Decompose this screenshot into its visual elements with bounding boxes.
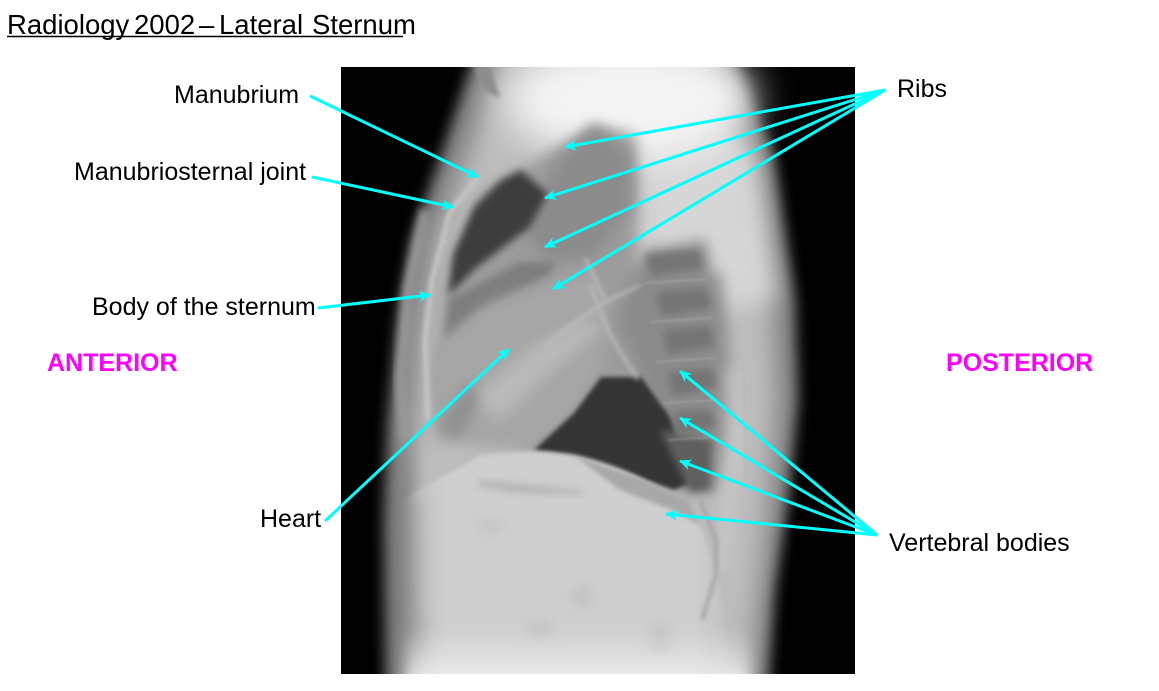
arrow: Manubrium bbox=[310, 96, 478, 177]
vertebral bodies bbox=[645, 250, 716, 436]
middle lung band bbox=[445, 262, 555, 340]
label: Body of the sternum: Body of the sternum bbox=[92, 293, 316, 321]
neck notch bbox=[474, 67, 500, 98]
lower abdomen shading bbox=[534, 590, 668, 645]
rib and vascular markings bbox=[564, 258, 641, 382]
title: 2002 bbox=[134, 9, 195, 40]
posterior soft tissue bbox=[724, 370, 742, 492]
left lower chest bbox=[417, 438, 514, 490]
label: Ribs: Ribs bbox=[897, 75, 947, 103]
bottom brightness bbox=[396, 636, 758, 674]
gastric bubble bbox=[478, 480, 585, 495]
title bbox=[7, 9, 416, 40]
title: Sternum bbox=[312, 9, 416, 40]
chest x-ray image bbox=[341, 40, 855, 691]
label: Manubriosternal joint: Manubriosternal joint bbox=[74, 158, 306, 186]
arrow: Body of the sternum bbox=[318, 295, 430, 308]
sternum edge bbox=[425, 178, 478, 420]
inner body density bbox=[412, 40, 778, 691]
arrow: Heart bbox=[325, 349, 509, 521]
title: Lateral bbox=[219, 9, 303, 40]
upper lung dark bbox=[448, 170, 548, 296]
arrow: Manubriosternal joint bbox=[312, 177, 453, 207]
subdiaphragm shadow bbox=[575, 456, 700, 525]
arrows: Vertebral bodies bbox=[666, 371, 877, 535]
shoulder brightness bbox=[640, 100, 775, 310]
vertebral end plates bbox=[645, 279, 716, 440]
anterior chest wall bbox=[400, 210, 425, 440]
arrows: Ribs bbox=[545, 90, 885, 289]
title: Radiology bbox=[7, 9, 130, 40]
label: Manubrium: Manubrium bbox=[174, 81, 299, 109]
thorax mid tone bbox=[432, 125, 735, 492]
title: – bbox=[199, 9, 215, 40]
lower lung dark bbox=[534, 377, 690, 490]
upper lung gray bbox=[525, 125, 632, 262]
label: Anterior: ANTERIOR bbox=[47, 349, 178, 377]
heart shadow bbox=[444, 281, 599, 440]
label: Heart: Heart bbox=[260, 505, 321, 533]
outer soft tissue silhouette bbox=[384, 40, 798, 691]
label: Vertebral bodies: Vertebral bodies bbox=[889, 529, 1070, 557]
posterior spine column bbox=[615, 240, 722, 490]
abdomen dome bbox=[405, 449, 719, 670]
label: Posterior: POSTERIOR bbox=[946, 349, 1093, 377]
